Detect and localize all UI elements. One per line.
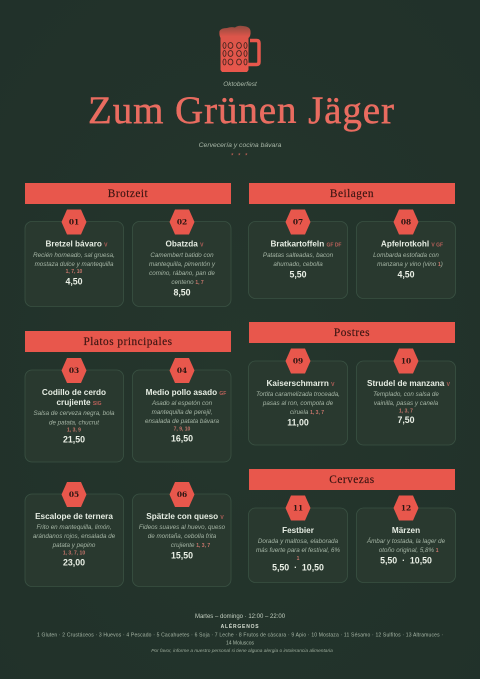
card 05: 23,00 bbox=[63, 558, 85, 568]
card 01: Bretzel bávaro V bbox=[45, 240, 108, 248]
eyebrow: Oktoberfest bbox=[223, 81, 258, 88]
card 03: 1, 3, 9 bbox=[67, 428, 81, 434]
banner: Cervezas: Cervezas bbox=[329, 474, 375, 486]
card 10: Strudel de manzana V bbox=[367, 379, 451, 388]
card 10 bbox=[356, 348, 456, 445]
card 11 bbox=[248, 496, 348, 582]
banner: Platos principales: Platos principales bbox=[83, 336, 173, 348]
panel: Beilagen bbox=[248, 183, 456, 298]
card 05: arándanos rojos, ensalada de bbox=[33, 533, 116, 540]
card 05: 1, 3, 7, 10 bbox=[63, 550, 85, 556]
card 12: Märzen bbox=[392, 526, 420, 535]
card 05: 05 bbox=[69, 490, 79, 499]
card 12: 12 bbox=[401, 504, 411, 513]
panel: Cervezas bbox=[248, 469, 456, 582]
card 10: 7,50 bbox=[397, 415, 415, 425]
card 04 bbox=[132, 358, 231, 462]
card 09: 11,00 bbox=[287, 418, 309, 428]
card 01 bbox=[25, 210, 124, 306]
card 04: 7, 9, 10 bbox=[174, 426, 191, 432]
banner: Beilagen: Beilagen bbox=[330, 188, 374, 200]
card 01: 01 bbox=[69, 218, 79, 227]
card 02: 02 bbox=[177, 218, 187, 227]
card 02: Obatzda V bbox=[166, 240, 204, 248]
card 10: vainilla, pasas y canela bbox=[374, 400, 439, 407]
card 05 bbox=[25, 482, 124, 586]
card 06: Fideos suaves al huevo, queso bbox=[139, 524, 226, 531]
card 05: patata y pepino bbox=[52, 542, 96, 549]
card 06 bbox=[132, 482, 231, 586]
card 10: 1, 3, 7 bbox=[399, 408, 413, 414]
card 12: Ámbar y tostada, la lager de bbox=[366, 538, 446, 545]
allergens list: 14 Moluscos bbox=[226, 640, 255, 646]
banner: Brotzeit: Brotzeit bbox=[108, 188, 149, 200]
card 02: comino, rábano, pan de bbox=[149, 270, 215, 277]
card 03: Salsa de cerveza negra, bola bbox=[34, 410, 115, 417]
banner: Beilagen bbox=[249, 183, 455, 204]
card 09: pasas al ron, compota de bbox=[262, 400, 334, 407]
opening hours: Martes – domingo · 12:00 – 22:00 bbox=[195, 614, 286, 620]
card 04: ensalada de patata bávara bbox=[145, 418, 220, 425]
card 01: 1, 7, 10 bbox=[66, 269, 83, 275]
card 08 bbox=[356, 210, 456, 298]
card 05: Frito en mantequilla, limón, bbox=[36, 524, 112, 531]
banner: Platos principales bbox=[25, 331, 231, 352]
banner: Cervezas bbox=[249, 469, 455, 490]
card 09: Kaiserschmarrn V bbox=[267, 379, 335, 388]
card 12 bbox=[356, 496, 456, 582]
allergens heading: ALÉRGENOS bbox=[221, 622, 259, 630]
icon: beer mug bbox=[219, 26, 259, 72]
panel: Brotzeit bbox=[25, 183, 231, 306]
banner: Postres: Postres bbox=[334, 327, 370, 339]
card 07: ahumado, cebolla bbox=[273, 261, 323, 268]
allergy note: Por favor, informe a nuestro personal si tiene alguna alergia o intolerancia alimentaria bbox=[151, 648, 333, 654]
card 02: Camembert batido con bbox=[150, 252, 214, 259]
subtitle: Cervecería y cocina bávara bbox=[199, 142, 282, 149]
card 08: 4,50 bbox=[397, 270, 415, 280]
card 03: crujiente SIG bbox=[56, 398, 102, 407]
card 07: Bratkartoffeln GF DF bbox=[271, 240, 341, 248]
card 03: 21,50 bbox=[63, 434, 85, 444]
card 06: crujiente 1, 3, 7 bbox=[171, 542, 210, 549]
card 09: 09 bbox=[293, 357, 303, 366]
card 04: Asado al espetón con bbox=[151, 400, 213, 407]
card 03: 03 bbox=[69, 366, 79, 375]
card 03: de patata, chucrut bbox=[49, 419, 99, 426]
card 09 bbox=[248, 348, 348, 445]
allergens list: 1 Gluten · 2 Crustáceos · 3 Huevos · 4 Pescado · 5 Cacahuetes · 6 Soja · 7 Leche · 8 Frutos de cáscara · 9 Apio · 10 Mostaza · 11 Sésamo · 12 Sulfitos · 13 Altramuces · bbox=[37, 632, 443, 638]
ornament stars: * * * bbox=[231, 154, 249, 160]
card 07: 07 bbox=[293, 218, 303, 227]
card 11: 5,50 · 10,50 bbox=[272, 562, 324, 572]
card 07: 5,50 bbox=[289, 270, 307, 280]
card 10: 10 bbox=[401, 357, 411, 366]
card 07 bbox=[248, 210, 348, 298]
card 03: Codillo de cerdo bbox=[42, 388, 106, 397]
card 06: de montaña, cebolla frita bbox=[148, 533, 217, 540]
card 01: Recién horneado, sal gruesa, bbox=[33, 252, 115, 259]
card 05: Escalope de ternera bbox=[35, 512, 113, 521]
card 11: 11 bbox=[293, 504, 303, 513]
card 02: centeno 1, 7 bbox=[171, 279, 204, 286]
panel: Platos principales bbox=[25, 331, 231, 586]
card 06: 15,50 bbox=[171, 550, 193, 560]
card 03 bbox=[25, 358, 124, 462]
title: Zum Grünen Jäger bbox=[88, 89, 394, 132]
card 02: 8,50 bbox=[173, 288, 191, 298]
card 02: mantequilla, pimentón y bbox=[149, 261, 216, 268]
card 11: 1 bbox=[297, 556, 300, 562]
card 10: Templado, con salsa de bbox=[373, 391, 439, 398]
card 06: Spätzle con queso V bbox=[146, 512, 224, 521]
card 01: mostaza dulce y mantequilla bbox=[35, 261, 114, 268]
card 04: mantequilla de perejil, bbox=[152, 409, 213, 416]
card 12: otoño original, 5,8% 1 bbox=[379, 547, 439, 554]
card 09: Tortita caramelizada troceada, bbox=[256, 391, 340, 398]
card 12: 5,50 · 10,50 bbox=[380, 556, 432, 566]
card 04: 16,50 bbox=[171, 434, 193, 444]
card 04: Medio pollo asado GF bbox=[146, 388, 226, 397]
allergens list bbox=[37, 632, 443, 646]
card 06: 06 bbox=[177, 490, 187, 499]
banner: Brotzeit bbox=[25, 183, 231, 204]
card 08: Apfelrotkohl V GF bbox=[381, 240, 443, 248]
footer bbox=[37, 614, 443, 654]
card 08: 08 bbox=[401, 218, 411, 227]
card 11: Festbier bbox=[282, 526, 315, 535]
card 08: Lombarda estofada con bbox=[373, 252, 439, 259]
card 01: 4,50 bbox=[65, 276, 83, 286]
card 11: más fuerte para el festival, 6% bbox=[256, 547, 340, 554]
banner: Postres bbox=[249, 322, 455, 343]
card 02 bbox=[132, 210, 231, 306]
panel: Postres bbox=[248, 322, 456, 445]
card 09: ciruela 1, 3, 7 bbox=[290, 409, 324, 416]
card 11: Dorada y maltosa, elaborada bbox=[258, 538, 339, 545]
card 04: 04 bbox=[177, 366, 187, 375]
card 08: manzana y vino (vino 1) bbox=[377, 261, 443, 268]
card 07: Patatas salteadas, bacon bbox=[263, 252, 334, 259]
